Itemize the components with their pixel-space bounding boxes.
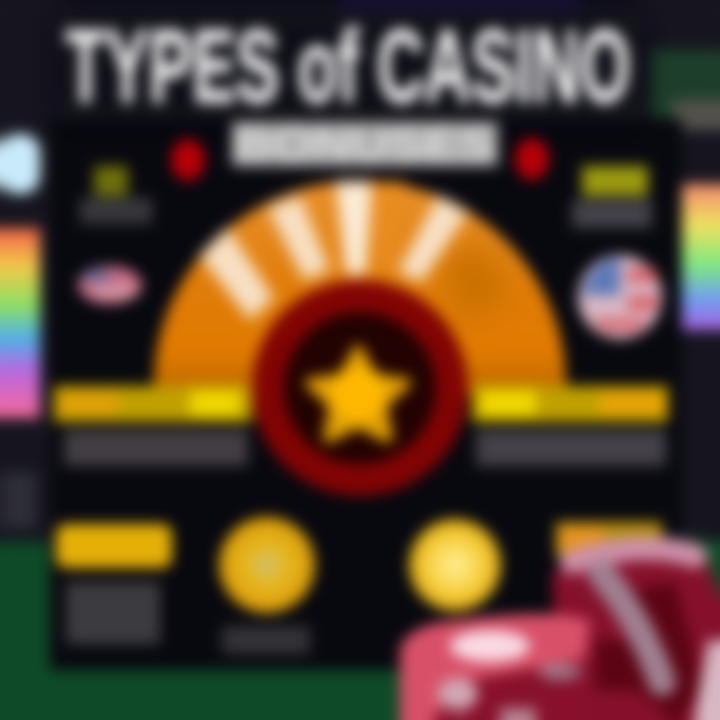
chip white spots: [450, 630, 530, 662]
left coin caption: [222, 626, 310, 654]
left banner text: [64, 430, 248, 466]
chip dark core: [630, 582, 705, 720]
red dot right: [515, 138, 549, 180]
wheel highlights: [200, 182, 468, 320]
chip edge right: [694, 640, 720, 720]
subtitle: BONUSES: [234, 118, 494, 170]
left edge decoration: [0, 134, 40, 418]
icon: gold coin left: [219, 517, 315, 613]
main dark panel: [50, 118, 682, 670]
chip band top: [572, 548, 695, 562]
chip body right: [530, 544, 720, 720]
central red ring: [252, 280, 468, 496]
icon: gold coin right: [409, 519, 501, 611]
chip band diagonal: [602, 574, 662, 682]
wheel shade right: [440, 250, 510, 320]
top left label: [80, 166, 152, 224]
wheel: [154, 181, 566, 395]
icon: small flag: [78, 266, 142, 304]
bottom left text: [66, 582, 160, 644]
top right label: [572, 166, 652, 228]
wheel light band: [372, 182, 404, 272]
right banner text: [476, 430, 666, 466]
title band shadow: [60, 12, 640, 122]
bottom left pill: [56, 524, 172, 568]
chip body left: [400, 614, 590, 720]
left yellow banner: [54, 386, 252, 422]
bottom right pill: [556, 522, 662, 558]
icon: star: [310, 350, 406, 438]
red dot left: [171, 139, 205, 181]
right yellow banner: [472, 386, 668, 422]
icon: flag coin: [578, 255, 662, 339]
casino chips: [400, 544, 720, 720]
right edge decoration: [682, 184, 720, 330]
